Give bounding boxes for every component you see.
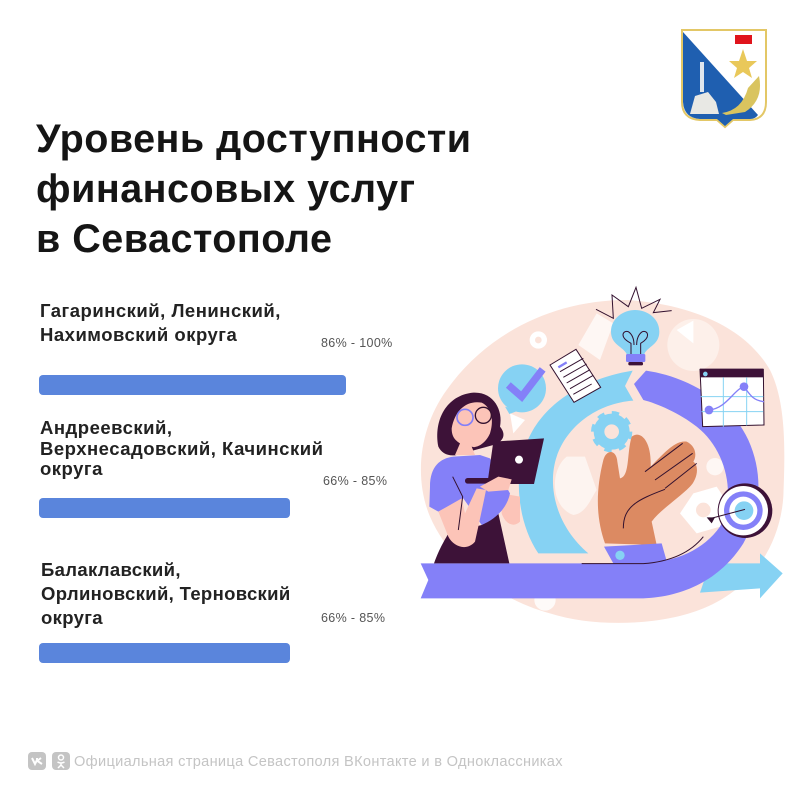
value label 2: 66% - 85% bbox=[323, 474, 387, 488]
coat of arms bbox=[681, 29, 767, 128]
title: финансовых услуг bbox=[36, 167, 416, 211]
district group 3 label: Орлиновский, Терновский bbox=[41, 583, 291, 604]
light bulb bbox=[596, 287, 672, 365]
illustration: business woman and hand with growth arrow bbox=[420, 286, 784, 623]
faded gears and chart bbox=[510, 313, 730, 611]
bar 3 bbox=[39, 643, 290, 663]
value label 1: 86% - 100% bbox=[321, 336, 393, 350]
district group 2 label: округа bbox=[40, 458, 103, 479]
check mark bubble bbox=[498, 364, 546, 414]
gear bbox=[594, 414, 630, 450]
title: Уровень доступности bbox=[36, 117, 472, 161]
district group 3 label: округа bbox=[41, 607, 103, 628]
district group 3 label: Балаклавский, bbox=[41, 559, 181, 580]
district group 2 label bbox=[40, 417, 323, 479]
district group 1 label: Гагаринский, Ленинский, bbox=[40, 300, 281, 321]
hand bbox=[598, 435, 697, 545]
background blob bbox=[421, 300, 784, 623]
title bbox=[36, 117, 472, 261]
title: в Севастополе bbox=[36, 217, 332, 261]
value label 3: 66% - 85% bbox=[321, 611, 385, 625]
bar 2 bbox=[39, 498, 290, 518]
light blue arrow bbox=[700, 553, 783, 598]
blue arc bbox=[519, 371, 633, 553]
target with arrow bbox=[707, 483, 772, 538]
district group 3 label bbox=[41, 559, 291, 628]
cuff bbox=[582, 537, 703, 564]
footer social icons bbox=[28, 752, 70, 770]
document bbox=[550, 349, 601, 402]
footer text: Официальная страница Севастополя ВКонтакте и в Одноклассниках bbox=[74, 754, 563, 770]
district group 1 label: Нахимовский округа bbox=[40, 324, 237, 345]
woman bbox=[429, 393, 544, 563]
line chart window bbox=[700, 369, 764, 427]
district group 2 label: Верхнесадовский, Качинский bbox=[40, 438, 323, 458]
district group 2 label: Андреевский, bbox=[40, 417, 173, 438]
district group 1 label bbox=[40, 300, 281, 345]
bar 1 bbox=[39, 375, 346, 395]
purple arc and ribbon bbox=[421, 371, 758, 598]
